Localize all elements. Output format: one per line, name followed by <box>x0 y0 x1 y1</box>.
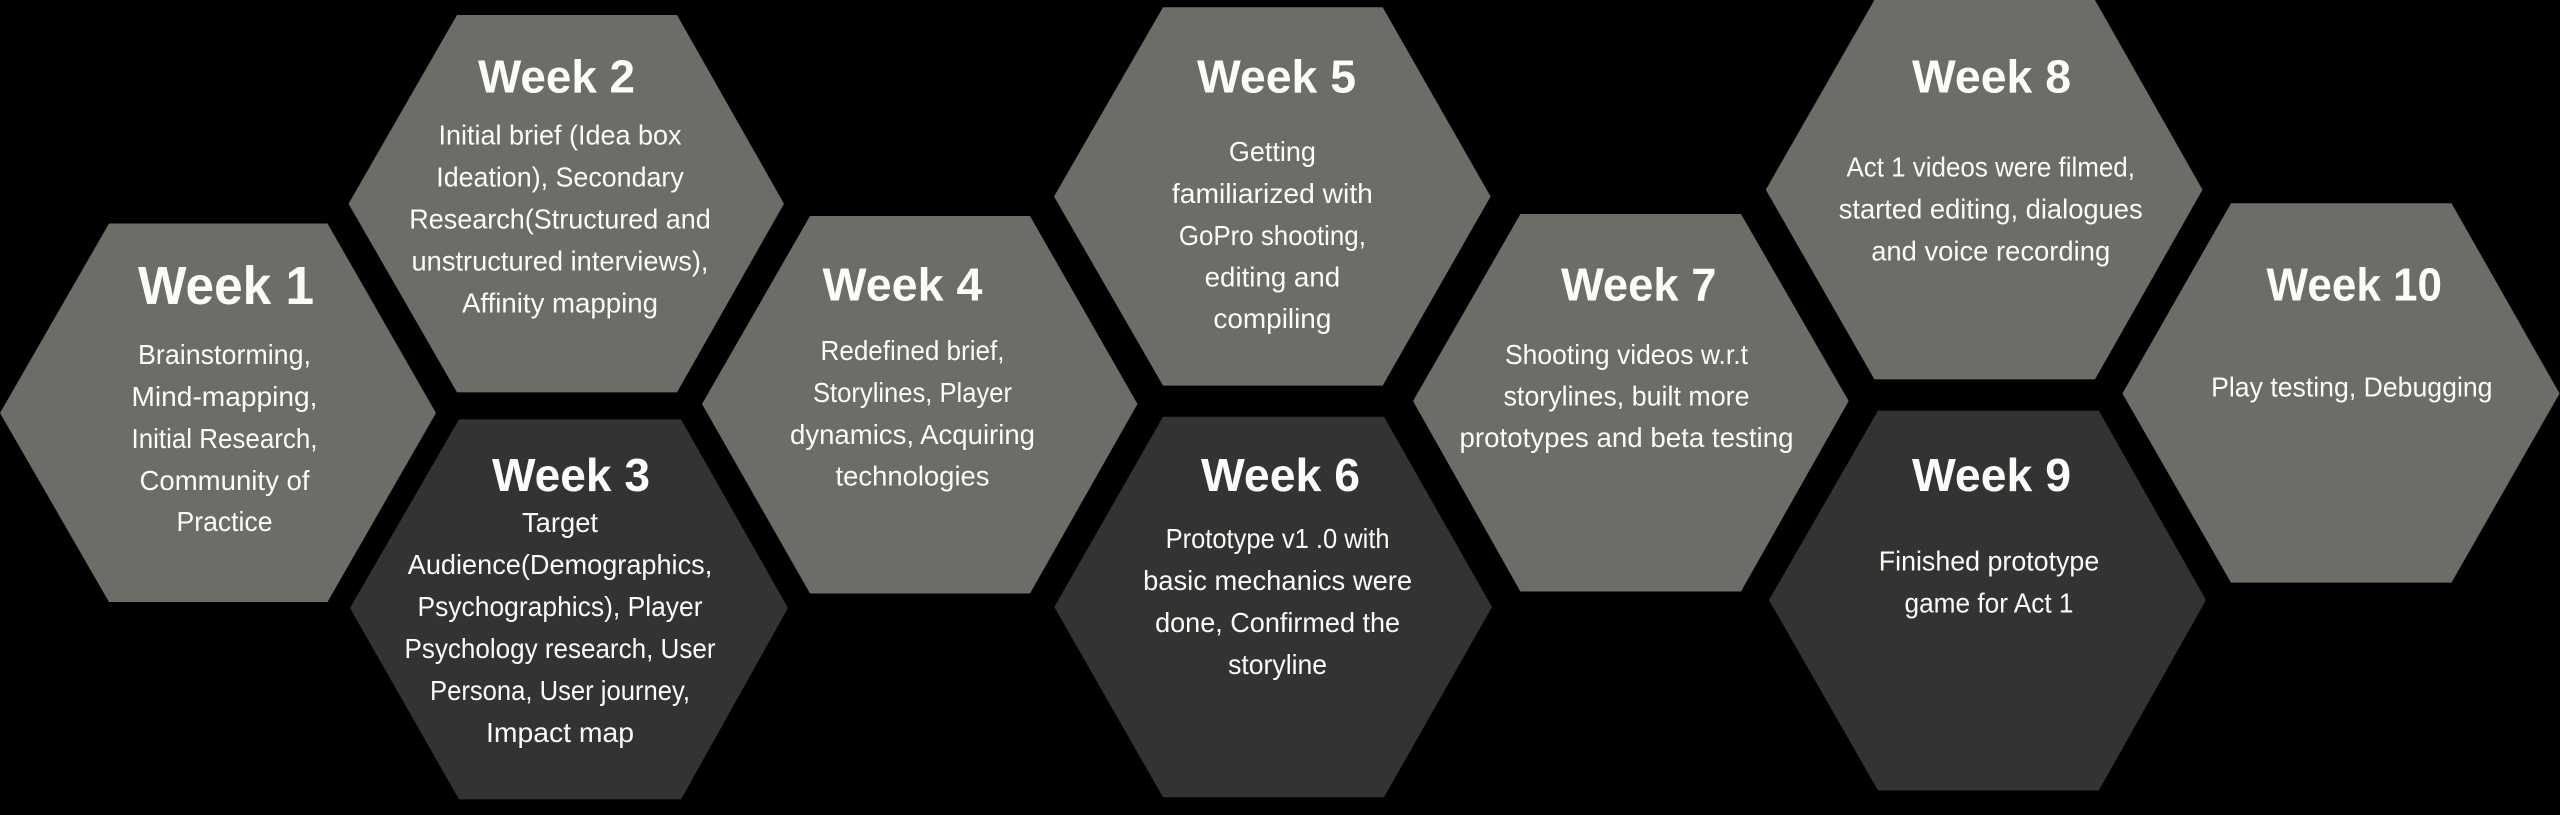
panel: week 1 <box>0 224 436 602</box>
text: week 7 tasks: storylines, built more <box>1504 380 1750 412</box>
text: week 6 tasks: storyline <box>1228 649 1327 680</box>
text: week 2 tasks: Research(Structured and <box>409 204 711 234</box>
text: week 5 tasks <box>1172 136 1373 334</box>
text: week 1 tasks: Practice <box>176 506 272 537</box>
text: week 2 tasks: Ideation), Secondary <box>436 162 684 192</box>
text: week 7 tasks: prototypes and beta testing <box>1460 422 1794 453</box>
panel: week 6 <box>1054 417 1492 797</box>
heading: week 10: Week 10 <box>2267 258 2442 310</box>
heading: week 4: Week 4 <box>822 258 983 310</box>
panel: week 10 <box>2122 203 2560 583</box>
text: week 3 tasks: Impact map <box>486 717 634 748</box>
heading: week 8: Week 8 <box>1912 50 2071 102</box>
heading: week 2: Week 2 <box>478 50 635 102</box>
text: week 6 tasks <box>1143 523 1412 680</box>
heading: week 6: Week 6 <box>1201 449 1360 501</box>
text: week 3 tasks <box>404 507 716 748</box>
text: week 4 tasks: Storylines, Player <box>813 377 1012 408</box>
text: week 9 tasks: Finished prototype <box>1879 546 2099 577</box>
text: week 2 tasks <box>409 120 711 318</box>
text: week 8 tasks: Act 1 videos were filmed, <box>1846 152 2135 183</box>
heading: week 7: Week 7 <box>1561 258 1716 310</box>
text: week 4 tasks <box>790 335 1035 492</box>
panel: week 2 <box>348 15 784 392</box>
text: week 9 tasks: game for Act 1 <box>1904 588 2074 618</box>
heading: week 1: Week 1 <box>138 256 314 316</box>
text: week 4 tasks: dynamics, Acquiring <box>790 419 1035 450</box>
text: week 5 tasks: editing and <box>1205 262 1340 292</box>
text: week 3 tasks: Target <box>522 507 598 538</box>
text: week 3 tasks: Persona, User journey, <box>430 675 690 706</box>
text: week 5 tasks: Getting <box>1229 136 1316 167</box>
text: week 6 tasks: done, Confirmed the <box>1155 607 1400 638</box>
text: week 5 tasks: GoPro shooting, <box>1179 220 1366 251</box>
text: week 5 tasks: familiarized with <box>1172 178 1373 209</box>
text: week 3 tasks: Psychographics), Player <box>418 591 702 622</box>
panel: week 4 <box>702 216 1138 594</box>
text: week 1 tasks <box>132 339 318 537</box>
text: week 2 tasks: unstructured interviews), <box>412 246 708 276</box>
text: week 3 tasks: Psychology research, User <box>404 633 716 664</box>
text: week 4 tasks: Redefined brief, <box>820 335 1004 366</box>
text: week 1 tasks: Community of <box>140 465 310 496</box>
panel: week 7 <box>1413 214 1849 592</box>
text: week 8 tasks <box>1839 152 2143 266</box>
text: week 8 tasks: and voice recording <box>1871 235 2110 266</box>
text: week 5 tasks: compiling <box>1213 303 1331 334</box>
text: week 8 tasks: started editing, dialogues <box>1839 194 2143 224</box>
text: week 1 tasks: Initial Research, <box>132 423 318 454</box>
text: week 3 tasks: Audience(Demographics, <box>408 549 712 580</box>
text: week 2 tasks: Initial brief (Idea box <box>438 120 682 150</box>
panel: week 3 <box>350 419 788 799</box>
panel: week 5 <box>1054 7 1491 386</box>
heading: week 3: Week 3 <box>492 449 650 501</box>
text: week 1 tasks: Brainstorming, <box>138 339 311 370</box>
text: week 7 tasks: Shooting videos w.r.t <box>1505 339 1748 370</box>
text: week 9 tasks <box>1879 546 2099 618</box>
text: week 10 tasks: Play testing, Debugging <box>2211 372 2492 403</box>
panel: week 9 <box>1769 411 2206 790</box>
panel: week 8 <box>1766 0 2202 379</box>
text: week 6 tasks: basic mechanics were <box>1143 565 1412 596</box>
heading: week 9: Week 9 <box>1912 449 2071 501</box>
text: week 2 tasks: Affinity mapping <box>462 288 658 318</box>
text: week 1 tasks: Mind-mapping, <box>132 381 318 412</box>
text: week 4 tasks: technologies <box>836 460 990 492</box>
text: week 6 tasks: Prototype v1 .0 with <box>1166 523 1390 554</box>
heading: week 5: Week 5 <box>1197 50 1356 102</box>
text: week 7 tasks <box>1460 339 1794 453</box>
